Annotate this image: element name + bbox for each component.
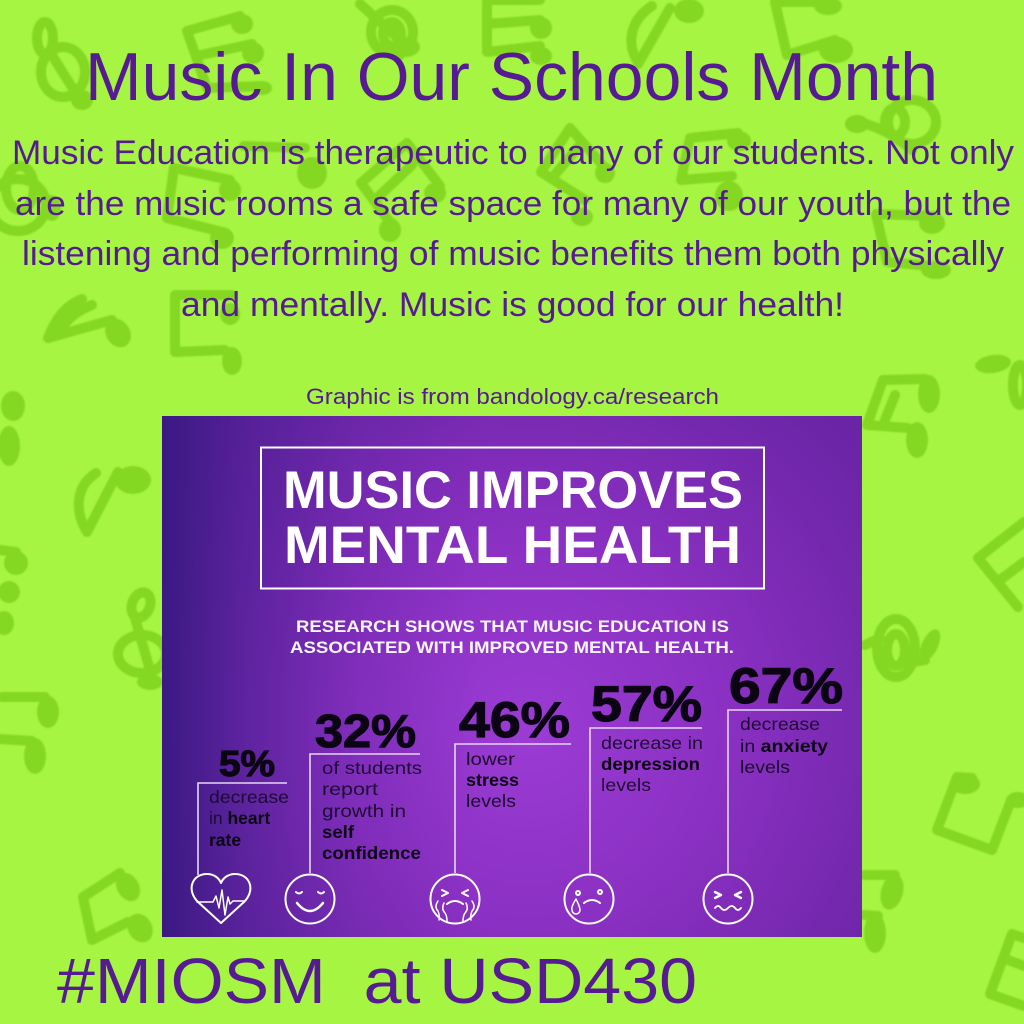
- stat: 46% lower stress: levels: [466, 791, 516, 811]
- note: beamed center: [361, 143, 446, 242]
- note: beamed right upper: [867, 375, 940, 458]
- note: eighth top center right: [631, 0, 704, 64]
- note: beamed left low: [0, 696, 59, 774]
- stat: 57% depression: decrease in: [601, 733, 703, 753]
- note: beamed right bottom: [864, 872, 907, 953]
- panel: music improves mental health: [162, 416, 862, 937]
- note: beamed middle right: [681, 131, 751, 211]
- note: beamed top center: [487, 0, 552, 65]
- stat: 32% self confidence: 32%: [315, 705, 416, 757]
- note: beamed center left: [167, 168, 241, 249]
- note: treble clef top left: [37, 22, 93, 110]
- stat: 67% anxiety: [728, 658, 843, 873]
- panel subheading: ASSOCIATED WITH IMPROVED MENTAL HEALTH.: [290, 638, 734, 657]
- note: beamed left bottom: [83, 869, 158, 947]
- panel subheading: [290, 617, 734, 657]
- panel subheading: RESEARCH SHOWS THAT MUSIC EDUCATION IS: [296, 617, 729, 636]
- stat: 46% lower stress: [455, 692, 571, 873]
- icon: heart with pulse: [192, 874, 250, 923]
- intro paragraph: Music Education is therapeutic to many of our students. Not only: [12, 134, 1014, 172]
- intro paragraph: listening and performing of music benefits them both physically: [22, 235, 1004, 273]
- note: treble clef left: [0, 166, 61, 231]
- stat: 32% self confidence: [310, 705, 422, 873]
- note: treble clef right edge: [974, 353, 1024, 405]
- note: heads left edge: [0, 391, 25, 466]
- stat: 32% self confidence: self: [322, 822, 354, 842]
- stat: 5% heart rate: in heart: [209, 808, 270, 828]
- panel heading: MUSIC IMPROVES: [283, 461, 743, 520]
- stat: 32% self confidence: growth in: [322, 801, 406, 821]
- stat: 5% heart rate: [198, 743, 289, 875]
- stat: 57% depression: levels: [601, 775, 651, 795]
- hashtag footer: #MIOSM at USD430: [57, 945, 697, 1017]
- note: beamed right corner: [990, 934, 1024, 1006]
- intro paragraph: and mentally. Music is good for our health!: [181, 286, 844, 324]
- stat: 67% anxiety: 67%: [729, 658, 843, 714]
- icon: anxious face: [704, 874, 752, 924]
- note: treble clef top center: [360, 4, 420, 57]
- note: single flag left: [175, 295, 242, 375]
- note: treble clef left center: [118, 590, 166, 690]
- note: beamed right: [876, 212, 951, 279]
- panel heading: [261, 448, 764, 588]
- stat: 57% depression: [590, 676, 703, 873]
- note: beamed top left: [187, 14, 272, 95]
- note: eighth left: [48, 299, 136, 352]
- stat: 46% lower stress: 46%: [459, 692, 570, 748]
- stat: 5% heart rate: 5%: [219, 743, 275, 784]
- icon: sad face with tear: [564, 874, 614, 924]
- title: Music In Our Schools Month: [85, 39, 938, 115]
- stat: 32% self confidence: confidence: [322, 843, 421, 863]
- stat: 67% anxiety: decrease: [740, 714, 820, 734]
- stat: 46% lower stress: lower: [466, 749, 515, 769]
- note: beamed top right: [775, 0, 853, 63]
- note: treble clef right: [845, 100, 936, 150]
- stat: 32% self confidence: of students: [322, 758, 422, 778]
- note: beamed right center: [978, 522, 1024, 607]
- icon: smiling face: [286, 874, 334, 924]
- note: beamed right low: [937, 774, 1024, 850]
- stat: 57% depression: 57%: [591, 676, 702, 732]
- stat: 67% anxiety: levels: [740, 757, 790, 777]
- stat: 5% heart rate: decrease: [209, 787, 289, 807]
- intro paragraph: are the music rooms a safe space for many of our youth, but the: [15, 185, 1011, 223]
- panel heading: MENTAL HEALTH: [284, 516, 741, 575]
- note: treble clef right center: [865, 619, 944, 677]
- icon: crying face: [430, 874, 480, 924]
- intro paragraph: [12, 134, 1014, 324]
- note: beamed middle: [541, 128, 615, 226]
- stat: 57% depression: depression: [601, 754, 700, 774]
- note: eighth left center: [79, 466, 151, 532]
- stat: 67% anxiety: in anxiety: [740, 736, 828, 756]
- source credit: Graphic is from bandology.ca/research: [306, 384, 719, 409]
- stat: 5% heart rate: rate: [209, 830, 241, 850]
- stat: 32% self confidence: report: [322, 779, 378, 799]
- stat: 46% lower stress: stress: [466, 770, 519, 790]
- note: single top center: [244, 146, 327, 189]
- note: heads left edge middle: [0, 550, 28, 635]
